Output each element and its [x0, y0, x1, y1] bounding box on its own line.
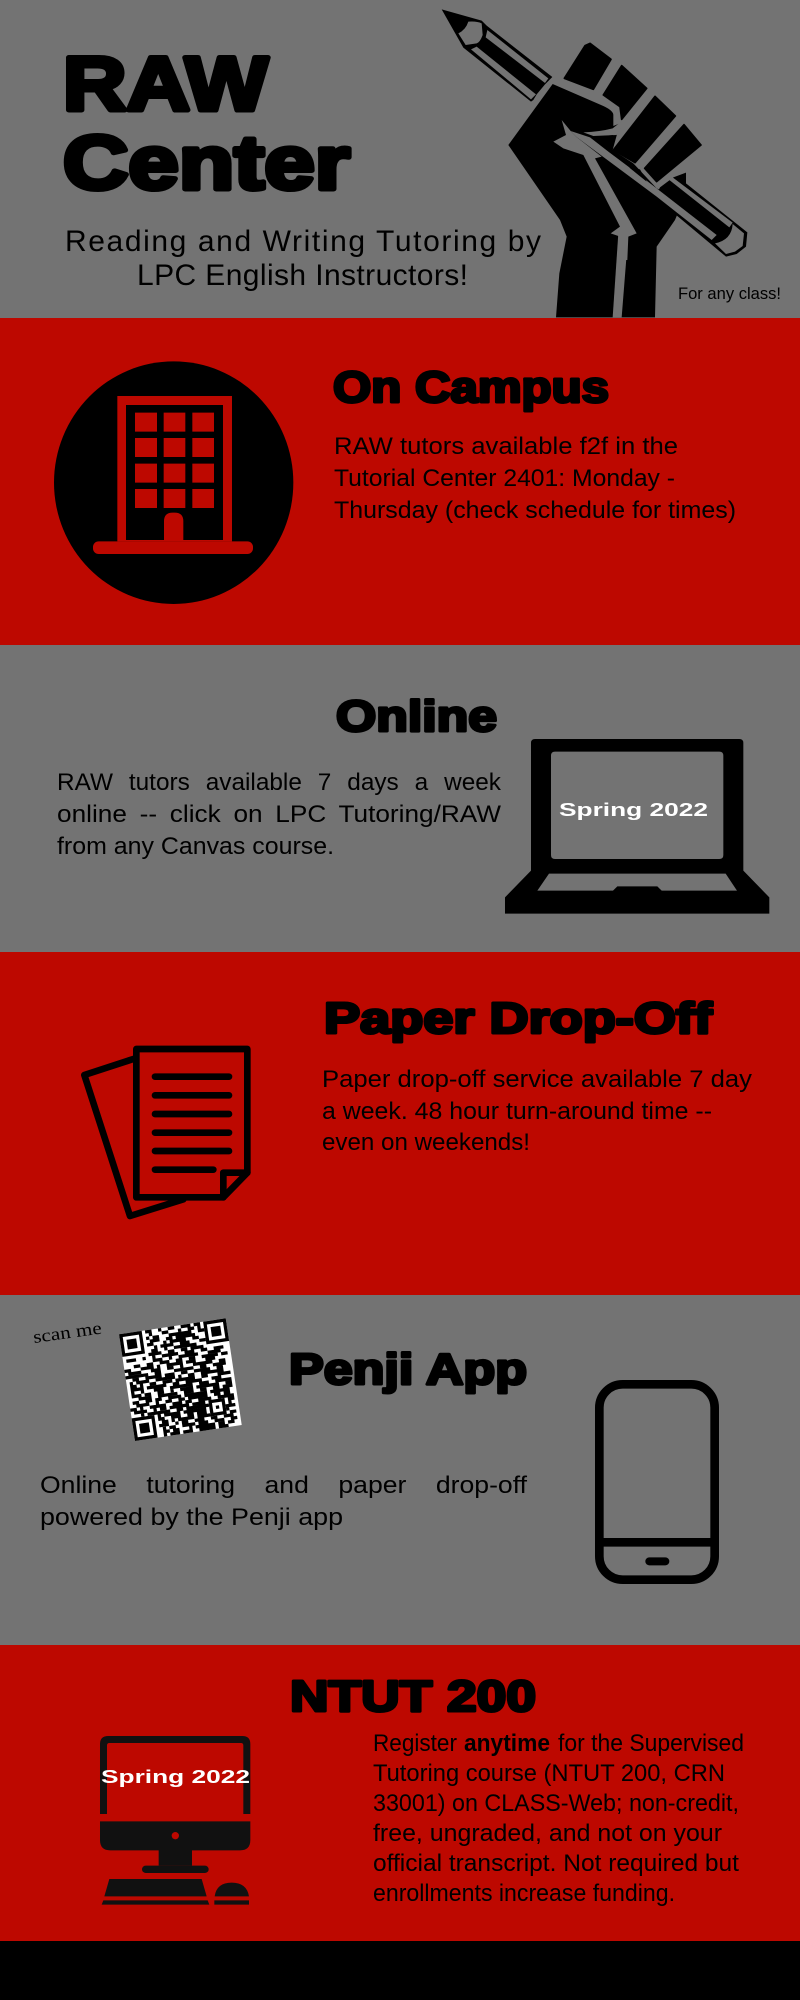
- icon: desktop computer: [100, 1736, 250, 1905]
- text: penji body: Online tutoring and paper drop-off: [40, 1472, 527, 1499]
- panel: paper drop-off: [0, 952, 800, 1295]
- title: [63, 42, 350, 206]
- icon: raised fist holding pencil: [442, 9, 747, 317]
- text: NTUT body: Register: [373, 1730, 457, 1757]
- footer band: [0, 1941, 800, 2000]
- text: on campus body: Tutorial Center 2401: Monday -: [334, 465, 675, 492]
- subtitle: Reading and Writing Tutoring by: [65, 225, 541, 258]
- text: online body: from any Canvas course.: [57, 833, 334, 860]
- text: paper drop-off body: Paper drop-off service available 7 day: [322, 1066, 752, 1093]
- text: NTUT body: 33001) on CLASS-Web; non-credit,: [373, 1790, 739, 1817]
- text: online body: RAW tutors available 7 days a week: [57, 769, 502, 796]
- heading: NTUT 200: NTUT 200: [290, 1672, 536, 1721]
- icon: laptop: [505, 739, 769, 914]
- icon: papers: [84, 1049, 247, 1216]
- text: NTUT body: enrollments increase funding.: [373, 1880, 675, 1907]
- text: paper drop-off body: [322, 1066, 752, 1156]
- heading: paper drop-off: Paper Drop-Off: [324, 994, 712, 1043]
- icon: smartphone: [599, 1384, 715, 1580]
- panel: online: [0, 645, 800, 952]
- title: RAW: [63, 42, 268, 127]
- text: penji body: powered by the Penji app: [40, 1504, 343, 1531]
- text: NTUT body: Tutoring course (NTUT 200, CRN: [373, 1760, 725, 1787]
- text: NTUT body: for the Supervised: [558, 1730, 744, 1757]
- panel: NTUT 200: [0, 1645, 800, 1941]
- text: paper drop-off body: a week. 48 hour turn-around time --: [322, 1098, 712, 1125]
- icon: building in circle: [54, 361, 293, 604]
- text: on campus body: RAW tutors available f2f in the: [334, 433, 678, 460]
- text: paper drop-off body: even on weekends!: [322, 1129, 530, 1156]
- text: NTUT body: official transcript. Not required but: [373, 1850, 739, 1877]
- panel: header: [0, 0, 800, 318]
- text: online body: [57, 769, 502, 860]
- text: NTUT body: free, ungraded, and not on your: [373, 1820, 722, 1847]
- text: on campus body: Thursday (check schedule for times): [334, 497, 736, 524]
- panel: penji app: [0, 1295, 800, 1645]
- heading: online: Online: [336, 692, 497, 741]
- subtitle: LPC English Instructors!: [137, 259, 468, 292]
- text: on campus body: [334, 433, 736, 524]
- heading: on campus: On Campus: [333, 363, 609, 412]
- text: online body: online -- click on LPC Tutoring/RAW: [57, 801, 501, 828]
- subtitle: [65, 225, 541, 292]
- text: NTUT body: [373, 1730, 744, 1907]
- heading: penji app: Penji App: [289, 1345, 527, 1394]
- scan me label: scan me: [32, 1318, 103, 1347]
- note: for any class: For any class!: [678, 284, 781, 303]
- QR code: [119, 1318, 242, 1441]
- text: NTUT body: anytime: [464, 1730, 550, 1757]
- screen label: Spring 2022: [101, 1767, 250, 1787]
- text: penji body: [40, 1472, 527, 1531]
- title: Center: [63, 121, 350, 206]
- panel: on campus: [0, 318, 800, 645]
- screen label: Spring 2022: [559, 800, 708, 820]
